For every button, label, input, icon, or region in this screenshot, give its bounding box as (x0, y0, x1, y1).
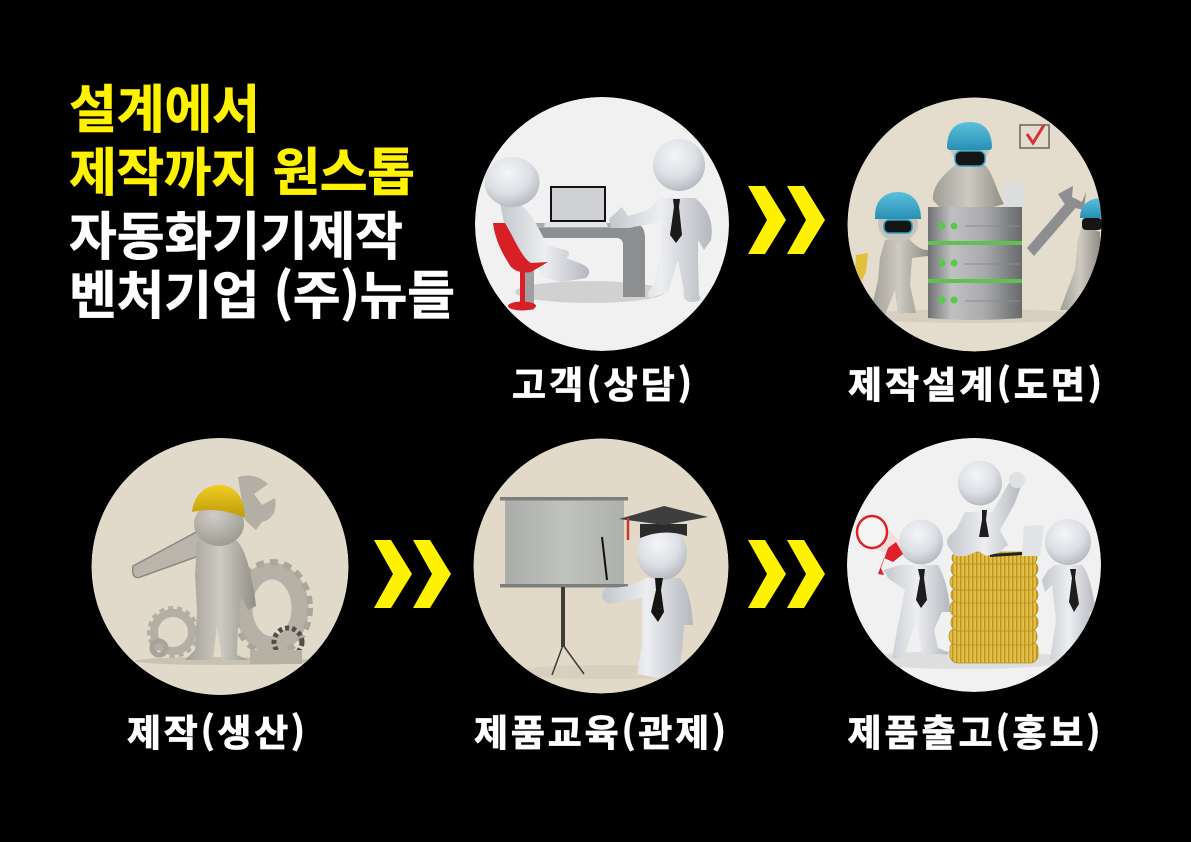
label: 고객(상담): 고객(상담) (512, 355, 692, 409)
panel: manufacturing (92, 438, 348, 695)
label: 제품출고(홍보): 제품출고(홍보) (848, 703, 1100, 757)
label: 제작설계(도면): 제작설계(도면) (848, 355, 1102, 409)
circle image: consultation at desk (475, 97, 729, 351)
subheading line: 벤처기업 (주)뉴들: 벤처기업 (주)뉴들 (69, 254, 455, 329)
circle image: worker with wrench and gears (92, 438, 348, 695)
arrow: chevrons 3 (748, 540, 825, 608)
heading line: 설계에서: 설계에서 (69, 68, 260, 143)
circle image: team on coin stack (847, 438, 1101, 692)
arrow: chevrons 2 (374, 540, 451, 608)
panel: production design (848, 98, 1102, 352)
heading line: 제작까지 원스톱: 제작까지 원스톱 (69, 131, 415, 206)
panel: customer consultation (475, 97, 729, 351)
heading block (69, 68, 455, 329)
label: 제품교육(관제): 제품교육(관제) (474, 703, 726, 757)
arrow: chevrons 1 (748, 186, 825, 254)
subheading line: 자동화기기제작: 자동화기기제작 (69, 195, 403, 270)
circle image: teacher with presentation screen (474, 438, 728, 694)
panel: product training (474, 438, 728, 694)
circle image: engineers with server drum (848, 98, 1102, 352)
label: 제작(생산): 제작(생산) (127, 703, 305, 757)
panel: product release (847, 438, 1101, 692)
